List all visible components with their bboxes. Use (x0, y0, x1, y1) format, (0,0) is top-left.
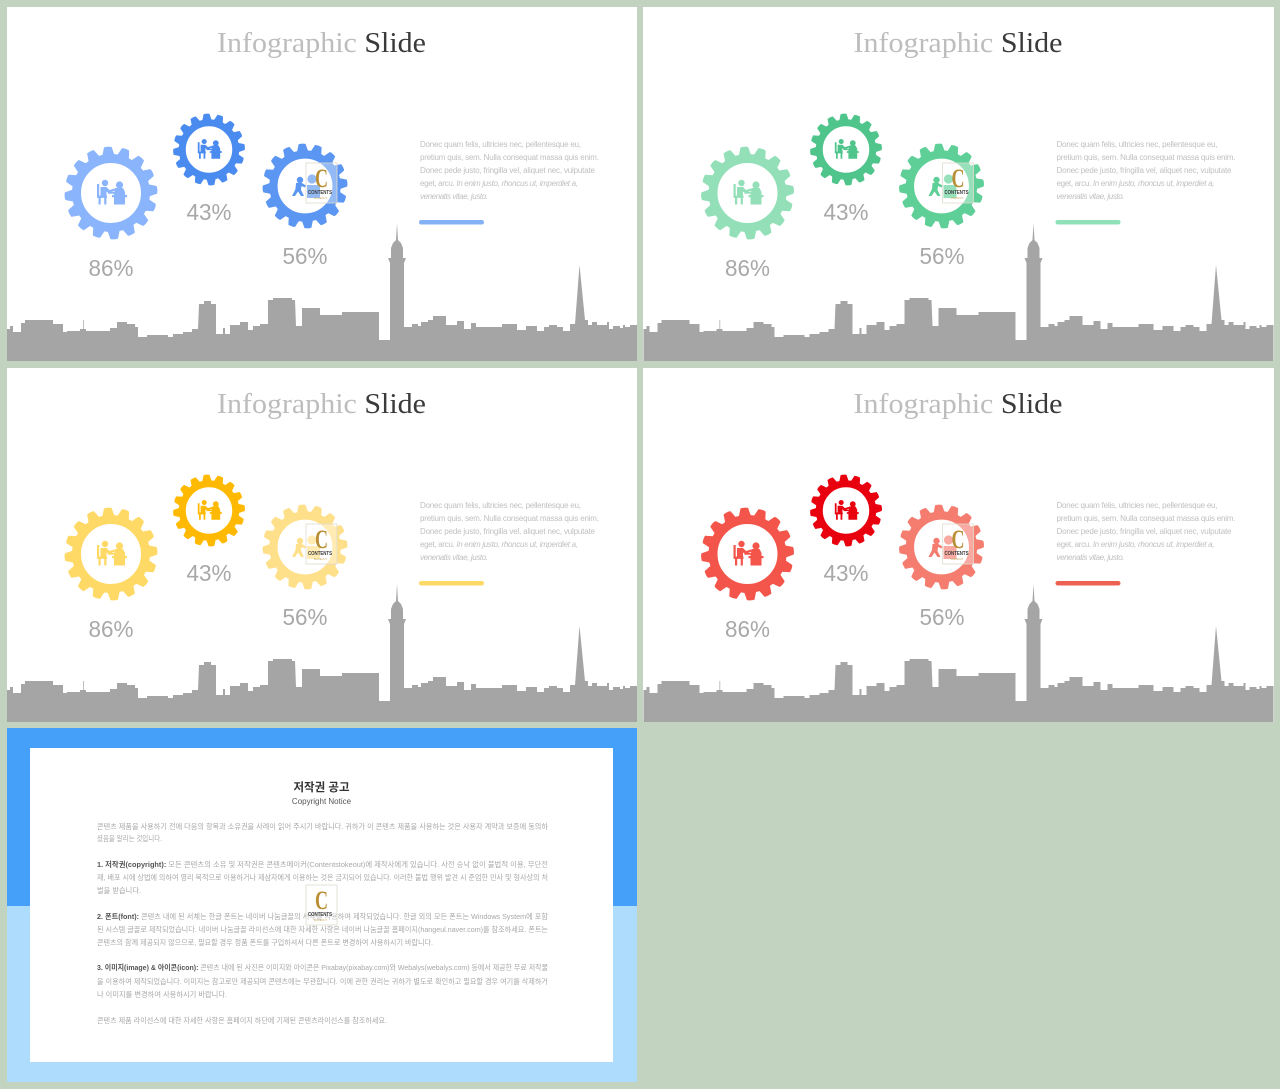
notice text: 콘텐츠 제품을 사용하기 전에 다음의 항목과 소유권을 사례이 읽어 주시기 바랍니다. 귀하가 이 콘텐츠 제품을 사용하는 것은 사용자 계약과 보증에 동의하 (97, 821, 548, 831)
title: Infographic Slide (217, 388, 426, 420)
watermark (306, 885, 337, 925)
text block: venenatis vitae, justo. (420, 553, 488, 562)
notice text: 1. 저작권(copyright): 모든 콘텐츠의 소유 및 저작권은 콘텐츠메이커(Contentstokeout)에 제작사에게 있습니다. 사전 승낙 없이 불법적 이용, 무단전 (97, 859, 548, 869)
skyline (644, 223, 1274, 361)
panel: copyright notice (7, 728, 637, 1082)
value 43%: 43% (824, 199, 869, 225)
panel: red slide (643, 368, 1274, 722)
watermark (942, 524, 974, 564)
notice text: 재, 배포 시에 상법에 의하여 영리 목적으로 이용하거나 제삼자에게 이용하는 것은 금지되어 있습니다. 이러한 불법 행위 발견 시 준엄한 민사 및 형사상의 처 (97, 872, 548, 882)
panel: blue slide (7, 7, 637, 361)
title: Infographic Slide (217, 27, 426, 59)
text block: eget, arcu. In enim justo, rhoncus ut, imperdiet a, (1056, 179, 1214, 188)
heading: 저작권 공고 (293, 780, 350, 794)
value 43%: 43% (186, 560, 232, 586)
text block: Donec pede justo, fringilla vel, aliquet nec, vulputate (1056, 527, 1232, 536)
accent bar (419, 581, 484, 586)
value 43%: 43% (186, 199, 232, 225)
text block: pretium quis, sem. Nulla consequat massa quis enim. (1056, 153, 1236, 162)
value 56%: 56% (920, 604, 965, 630)
panel: green slide (643, 7, 1274, 361)
value 86%: 86% (88, 616, 134, 642)
text block: pretium quis, sem. Nulla consequat massa quis enim. (420, 153, 599, 162)
notice text: 을 이용하여 제작되었습니다. 이미지는 참고로만 제공되며 콘텐츠에는 무관합니다. 이에 관한 권리는 귀하가 별도로 확인하고 필요할 경우 여기를 삭제하거 (97, 976, 548, 986)
text block: Donec pede justo, fringilla vel, aliquet nec, vulputate (420, 527, 596, 536)
text block (420, 501, 599, 562)
notice text: 2. 폰트(font): 콘텐츠 내에 된 서체는 한글 폰트는 네이버 나눔글꼴의 서체를 사용하여 제작되었습니다. 한글 외의 모든 폰트는 Windows System에 포함 (97, 911, 548, 921)
skyline (7, 223, 637, 361)
watermark (306, 163, 337, 203)
gear: 43% (171, 111, 247, 188)
text block: Donec pede justo, fringilla vel, aliquet nec, vulputate (1056, 166, 1232, 175)
value 86%: 86% (725, 616, 770, 642)
text block (1056, 501, 1236, 562)
text block: pretium quis, sem. Nulla consequat massa quis enim. (1056, 514, 1236, 523)
value 43%: 43% (824, 560, 869, 586)
gear: 86% (698, 143, 797, 243)
notice text: 벌을 받습니다. (97, 885, 141, 895)
notice text: 콘텐츠의 함께 제공되지 않으므로, 필요할 경우 정품 폰트를 구입하셔서 다른 폰트로 변경하여 사용하시기 바랍니다. (97, 937, 433, 947)
gear: 56% (896, 502, 987, 592)
text block (1056, 140, 1236, 201)
notice text (97, 821, 548, 1025)
gear: 86% (61, 504, 161, 604)
text block: pretium quis, sem. Nulla consequat massa quis enim. (420, 514, 599, 523)
notice text: 나 이미지를 변경하여 사용하시기 바랍니다. (97, 989, 227, 999)
text block: Donec quam felis, ultricies nec, pellentesque eu, (1056, 501, 1218, 510)
text block: Donec pede justo, fringilla vel, aliquet nec, vulputate (420, 166, 596, 175)
gear: 86% (698, 504, 797, 604)
gear: 56% (260, 502, 350, 592)
subheading: Copyright Notice (292, 797, 352, 806)
text block: Donec quam felis, ultricies nec, pellentesque eu, (1056, 140, 1218, 149)
notice text: 3. 이미지(image) & 아이콘(icon): 콘텐츠 내에 된 사진은 이미지와 아이콘은 Pixabay(pixabay.com)와 Webalys(webalys.com) 등에서 제공한 무료 저작물 (97, 962, 548, 972)
text block: venenatis vitae, justo. (420, 192, 488, 201)
title: Infographic Slide (854, 388, 1062, 420)
text block: Donec quam felis, ultricies nec, pellentesque eu, (420, 501, 581, 510)
notice text: 된 시스템 글꼴로 제작되었습니다. 네이버 나눔글꼴 라이선스에 대한 자세한 사항은 네이버 나눔글꼴 홈페이지(hangeul.naver.com)를 참조하세요. 폰트는 (97, 924, 548, 934)
value 56%: 56% (282, 604, 328, 630)
title: Infographic Slide (854, 27, 1062, 59)
text block: venenatis vitae, justo. (1056, 553, 1124, 562)
gear: 86% (61, 143, 161, 243)
value 56%: 56% (282, 243, 328, 269)
text block: eget, arcu. In enim justo, rhoncus ut, imperdiet a, (420, 540, 578, 549)
gear: 43% (171, 472, 247, 549)
value 86%: 86% (88, 255, 134, 281)
accent bar (1056, 220, 1120, 224)
gear: 56% (896, 141, 987, 231)
text block: eget, arcu. In enim justo, rhoncus ut, imperdiet a, (420, 179, 578, 188)
text block: venenatis vitae, justo. (1056, 192, 1124, 201)
accent bar (1056, 581, 1120, 586)
gear: 43% (808, 111, 884, 188)
panel: yellow slide (7, 368, 637, 722)
notice text: 셨음을 알리는 것입니다. (97, 833, 162, 843)
skyline (644, 584, 1274, 722)
watermark (942, 163, 974, 203)
watermark (306, 524, 337, 564)
value 86%: 86% (725, 255, 770, 281)
text block (420, 140, 599, 201)
text block: Donec quam felis, ultricies nec, pellentesque eu, (420, 140, 581, 149)
text block: eget, arcu. In enim justo, rhoncus ut, imperdiet a, (1056, 540, 1214, 549)
gear: 56% (260, 141, 350, 231)
accent bar (419, 220, 484, 224)
gear: 43% (808, 472, 884, 549)
notice text: 콘텐츠 제품 라이선스에 대한 자세한 사항은 홈페이지 하단에 기재된 콘텐츠라이선스를 참조하세요. (97, 1015, 387, 1025)
value 56%: 56% (920, 243, 965, 269)
skyline (7, 584, 637, 722)
